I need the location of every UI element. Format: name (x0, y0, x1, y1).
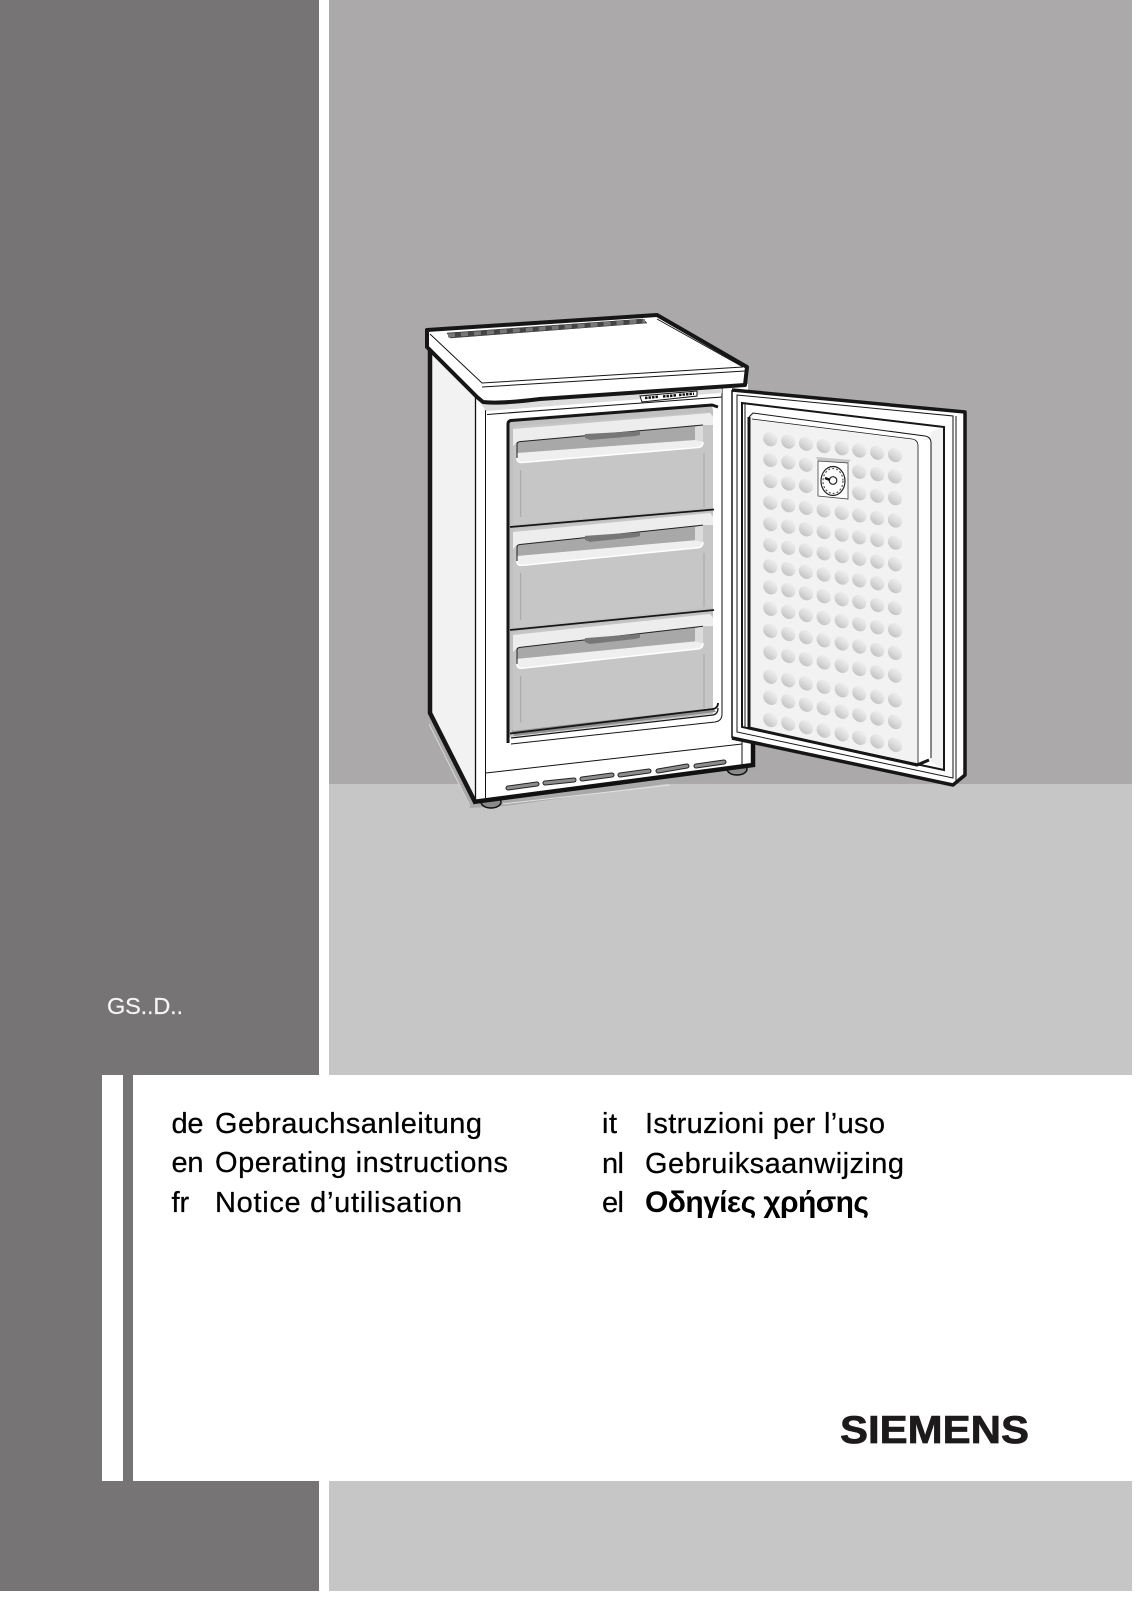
logo: SIEMENS: SIEMENS (840, 1409, 1029, 1452)
cabinet side (430, 345, 477, 802)
door (732, 390, 965, 785)
language list: left column: Notice d’utilisation (215, 1187, 462, 1219)
thermometer dial (816, 457, 851, 503)
door liner (748, 413, 931, 765)
language list: right column: nl (602, 1148, 624, 1180)
illustration: open upright freezer (427, 315, 965, 808)
shadow under lid (477, 389, 722, 411)
feet (481, 763, 747, 808)
door dimples (763, 431, 902, 753)
drawer 1 bottom edge (510, 510, 714, 527)
language list: left column: fr (172, 1187, 190, 1219)
door edge lines (732, 390, 965, 785)
lid vent strip (447, 319, 647, 338)
floor shadow (429, 713, 760, 808)
door outer shell (732, 390, 965, 785)
door seal strip (931, 427, 944, 770)
plinth vent slots (508, 762, 724, 788)
drawer 1 (513, 412, 713, 525)
language list: right column: el (602, 1187, 624, 1219)
panel: dark left column (0, 0, 319, 1591)
rating plate (640, 391, 697, 402)
model number: GS..D.. (107, 993, 183, 1019)
panel: white title band (102, 1075, 1132, 1481)
drawer 2 bottom edge (510, 610, 714, 630)
drawer 3 (513, 613, 713, 731)
language list: left column (172, 1108, 508, 1219)
language list: right column (602, 1108, 904, 1219)
background: upper grey wall (329, 0, 1132, 784)
cabinet side outline (430, 345, 475, 802)
language list: right column: Istruzioni per l’uso (645, 1108, 885, 1140)
language list: right column: Gebruiksaanwijzing (645, 1148, 904, 1180)
language list: left column: en (172, 1147, 204, 1179)
language list: right column: Οδηγίες χρήσης (645, 1186, 869, 1219)
language list: right column: it (602, 1108, 617, 1140)
background: lower grey floor (329, 784, 1132, 1591)
drawer 2 (513, 512, 713, 628)
language list: left column: Gebrauchsanleitung (215, 1108, 482, 1140)
cabinet outline and frame lines (473, 388, 753, 802)
language list: left column: Operating instructions (215, 1147, 508, 1179)
lid (427, 315, 747, 403)
language list: left column: de (172, 1108, 204, 1140)
compartment interior (508, 405, 722, 744)
cabinet front (475, 384, 753, 802)
